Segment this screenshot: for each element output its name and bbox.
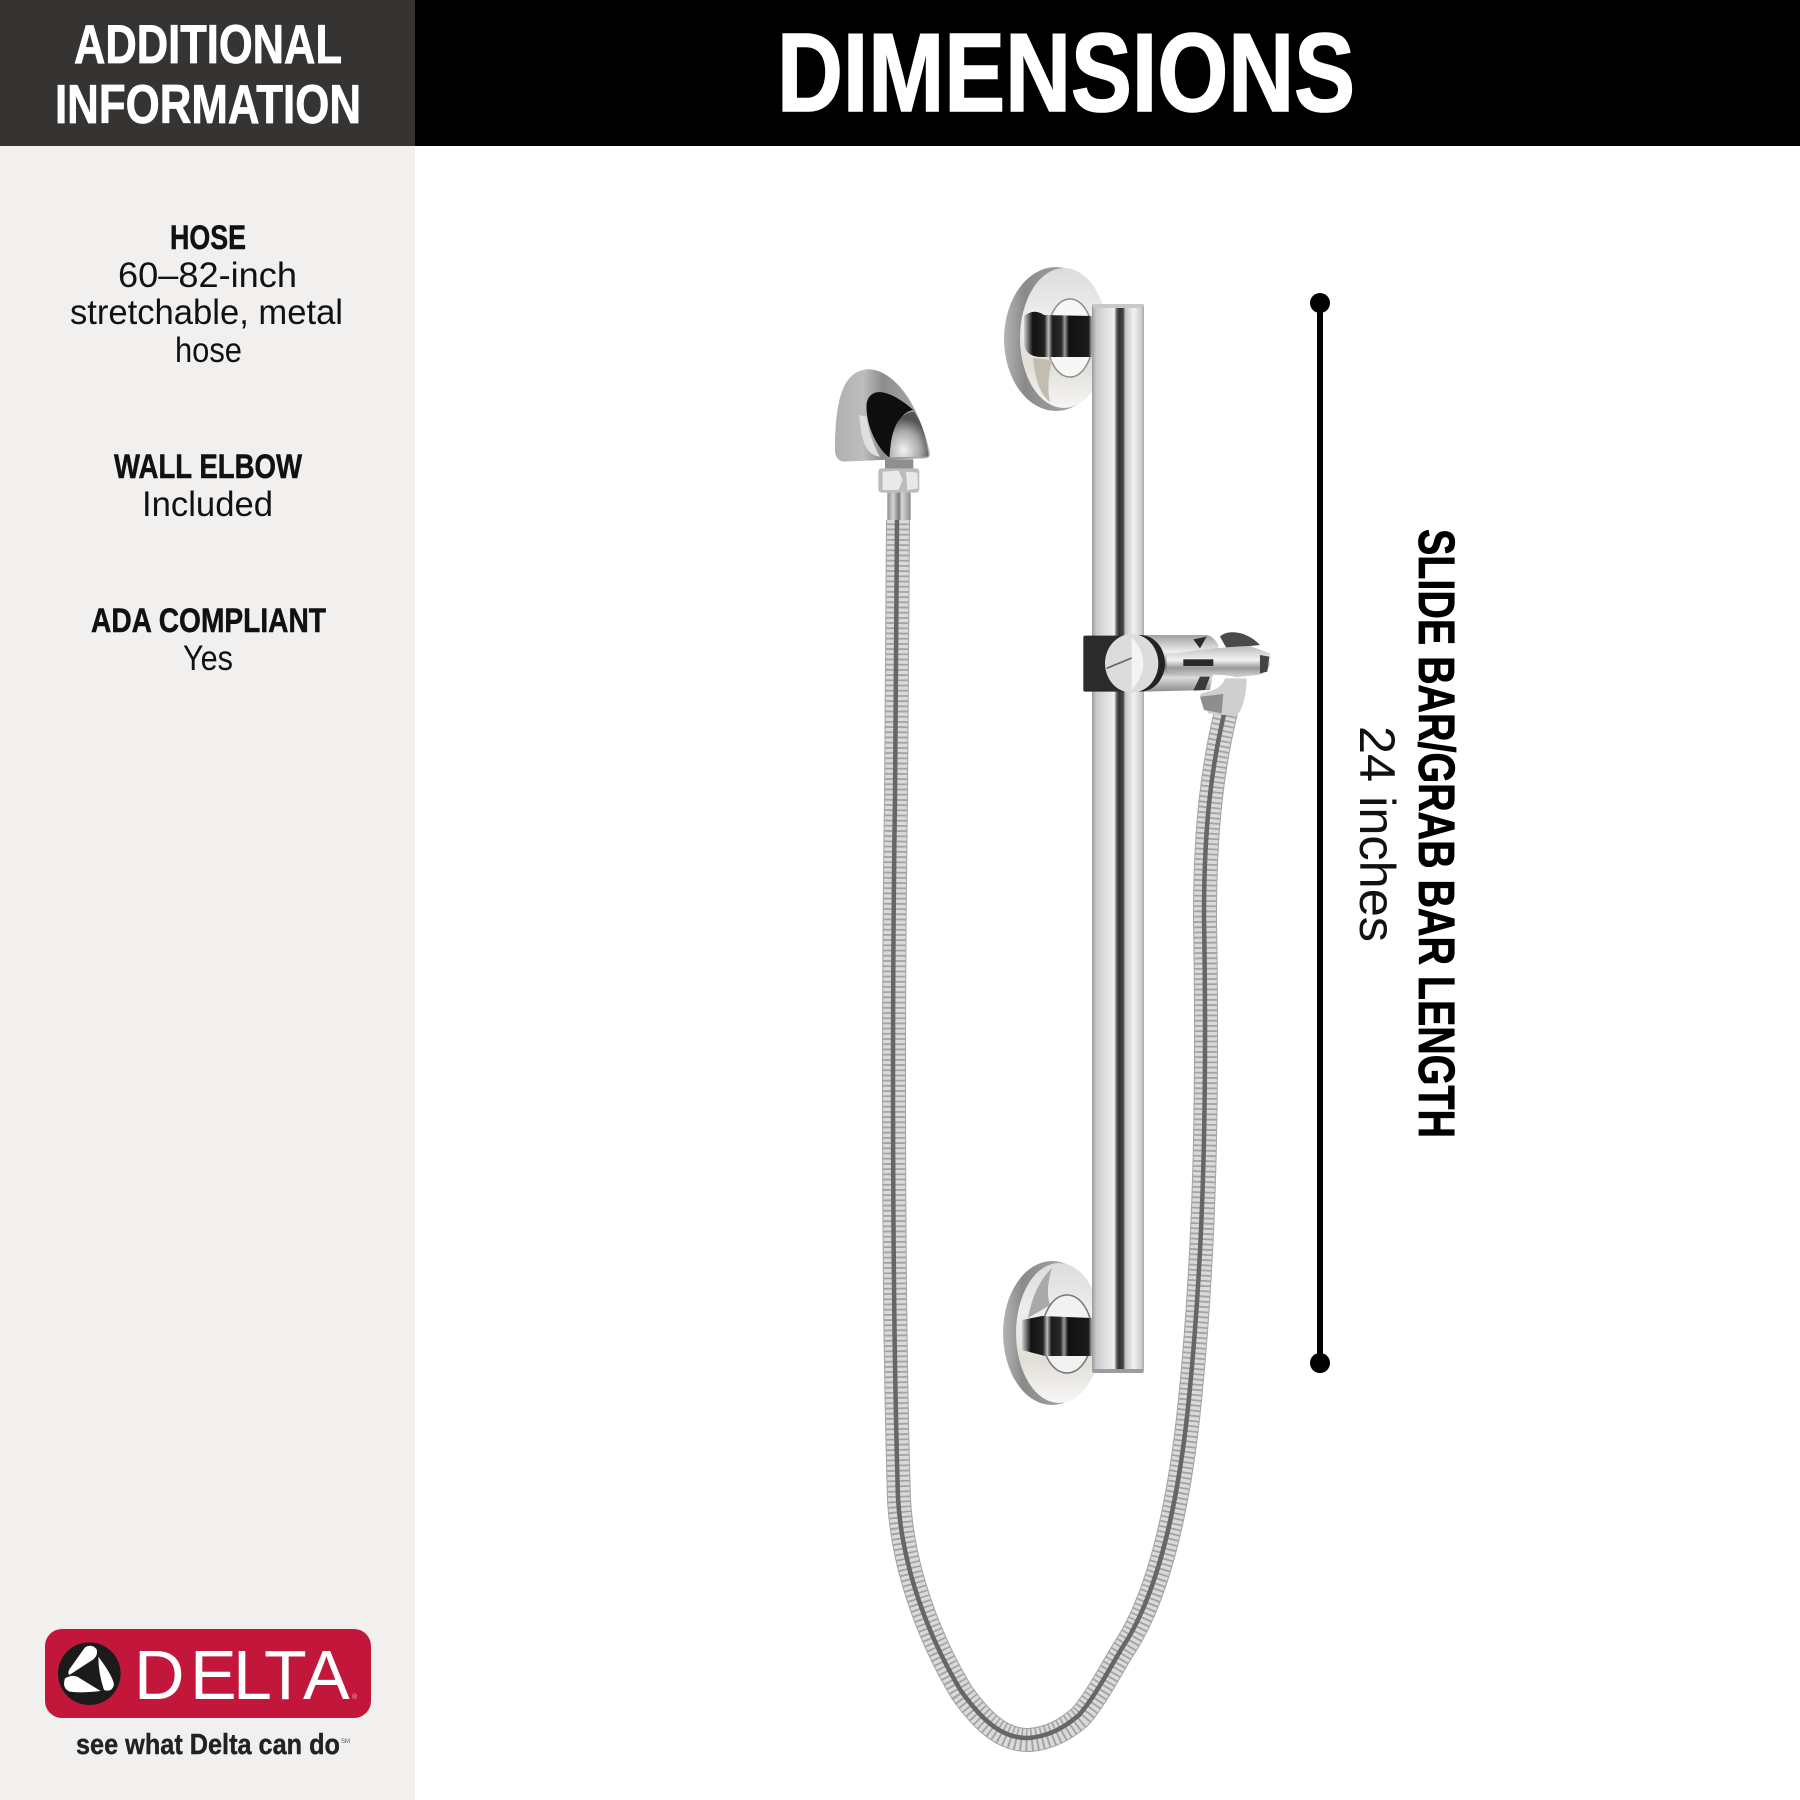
panel: sidebar background [0,146,415,1800]
text block: wall elbow [114,448,303,524]
logo: delta: DELTA [134,1636,350,1714]
text block: hose: 60–82-inch [118,256,297,295]
panel: additional information header: ADDITIONAL [74,13,342,75]
slide bar tube [1092,304,1144,1373]
panel: additional information header [0,0,415,146]
text block: wall elbow: WALL ELBOW [114,448,303,486]
label: slide bar length heading: SLIDE BAR/GRAB BAR LENGTH [1408,529,1465,1138]
slider mount [1083,632,1270,716]
text block: hose [70,219,343,370]
top wall flange [1004,267,1108,411]
logo: delta [45,1629,371,1761]
icon: delta triangle mark [58,1642,121,1705]
panel: additional information header: INFORMATION [55,73,361,135]
label: 24 inches: 24 inches [1349,726,1405,942]
panel: dimensions title bar [415,0,1800,146]
logo: delta: ® [352,1693,358,1701]
logo: delta: SM [341,1739,350,1745]
text block: hose: HOSE [170,219,246,257]
text block: ada compliant [91,602,326,678]
panel: dimensions title bar: DIMENSIONS [777,11,1355,135]
text block: hose: stretchable, metal [70,293,343,332]
text block: ada compliant: ADA COMPLIANT [91,602,326,640]
bottom wall flange [1003,1261,1102,1405]
wall elbow fitting [835,369,930,520]
text block: wall elbow: Included [142,485,273,524]
text block: ada compliant: Yes [183,639,233,678]
measurement line: slide bar length [1310,293,1330,1373]
hose [893,518,1226,1740]
grab bar [1003,267,1144,1405]
tagline: see what Delta can do [76,1729,340,1761]
text block: hose: hose [175,331,242,370]
